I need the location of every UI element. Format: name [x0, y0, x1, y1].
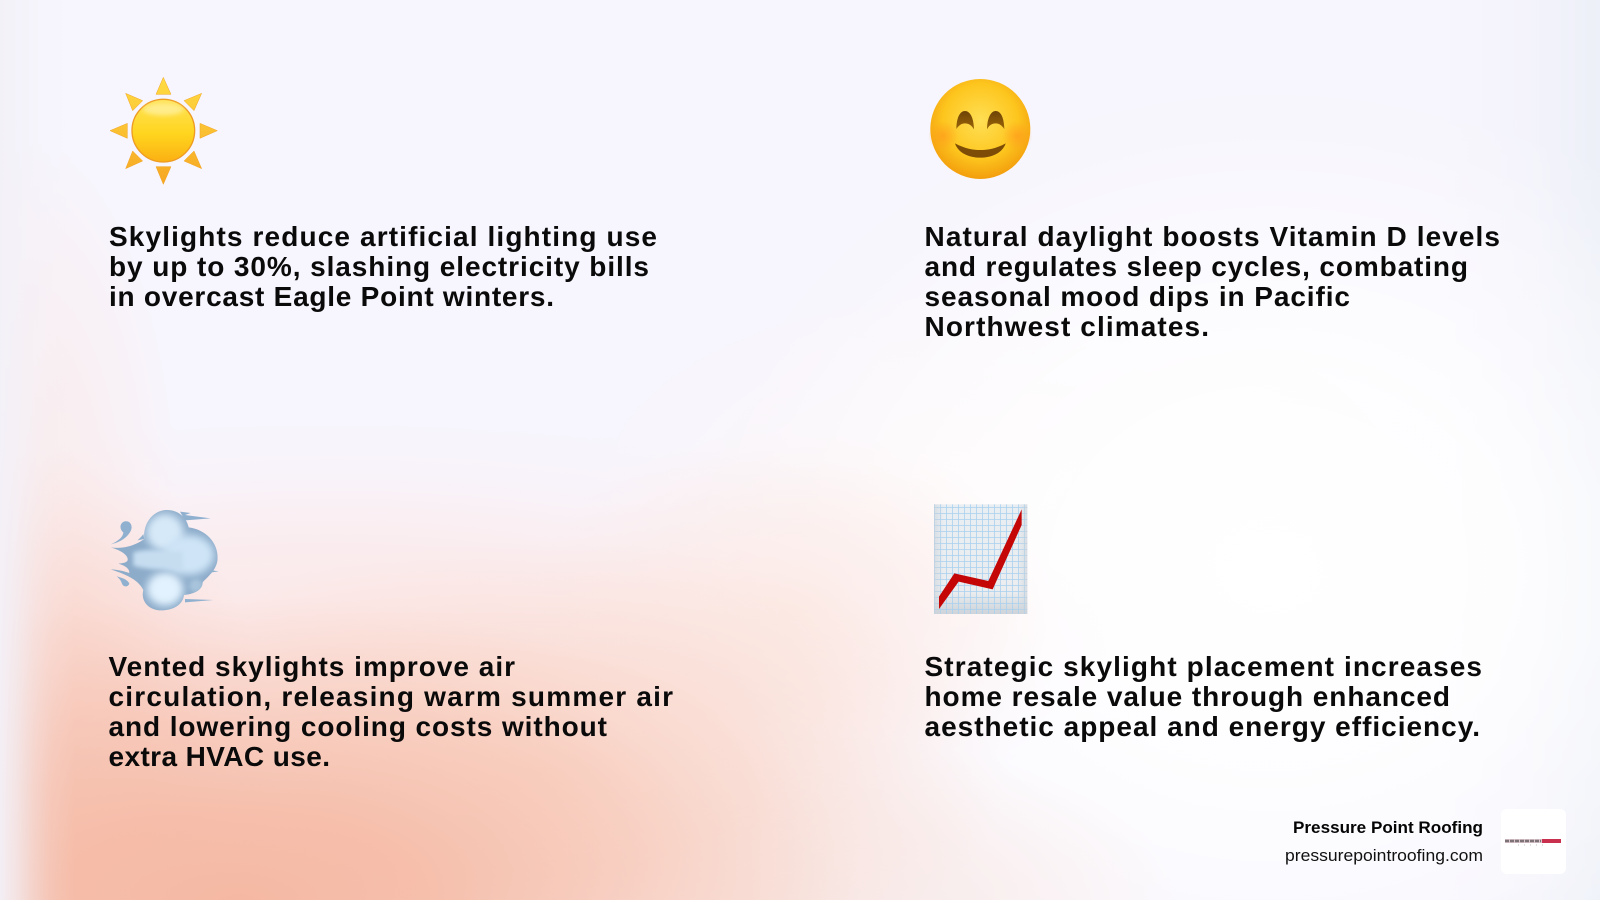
text: resale value: aesthetic appeal and energy efficiency.: [924, 711, 1480, 742]
text: vented skylights: extra HVAC use.: [108, 741, 330, 772]
logo: [1501, 809, 1566, 874]
text: artificial lighting: [109, 221, 657, 312]
text: vitamin D: Northwest climates.: [924, 311, 1209, 342]
icon: wind puff: [108, 508, 220, 612]
text: resale value: [924, 651, 1482, 742]
text: vitamin D: [924, 221, 1500, 342]
text: vented skylights: circulation, releasing warm summer air: [108, 681, 673, 712]
icon: sun: [110, 77, 217, 184]
text: artificial lighting: in overcast Eagle Point winters.: [109, 281, 554, 312]
text: resale value: Strategic skylight placement increases: [924, 651, 1482, 682]
text: vitamin D: Natural daylight boosts Vitamin D levels: [924, 221, 1500, 252]
icon: smiling face: [928, 79, 1032, 179]
text: vented skylights: [108, 651, 673, 772]
footer: brand name and website: Pressure Point Roofing: [1293, 818, 1483, 837]
footer: brand name and website: pressurepointroofing.com: [1285, 846, 1483, 865]
text: artificial lighting: Skylights reduce artificial lighting use: [109, 221, 657, 252]
footer: brand name and website: [1285, 818, 1483, 865]
text: vitamin D: seasonal mood dips in Pacific: [924, 281, 1350, 312]
text: vented skylights: Vented skylights improve air: [108, 651, 515, 682]
text: vented skylights: and lowering cooling costs without: [108, 711, 607, 742]
text: artificial lighting: by up to 30%, slashing electricity bills: [109, 251, 649, 282]
text: resale value: home resale value through enhanced: [924, 681, 1450, 712]
icon: rising chart: [934, 504, 1027, 614]
text: vitamin D: and regulates sleep cycles, combating: [924, 251, 1468, 282]
